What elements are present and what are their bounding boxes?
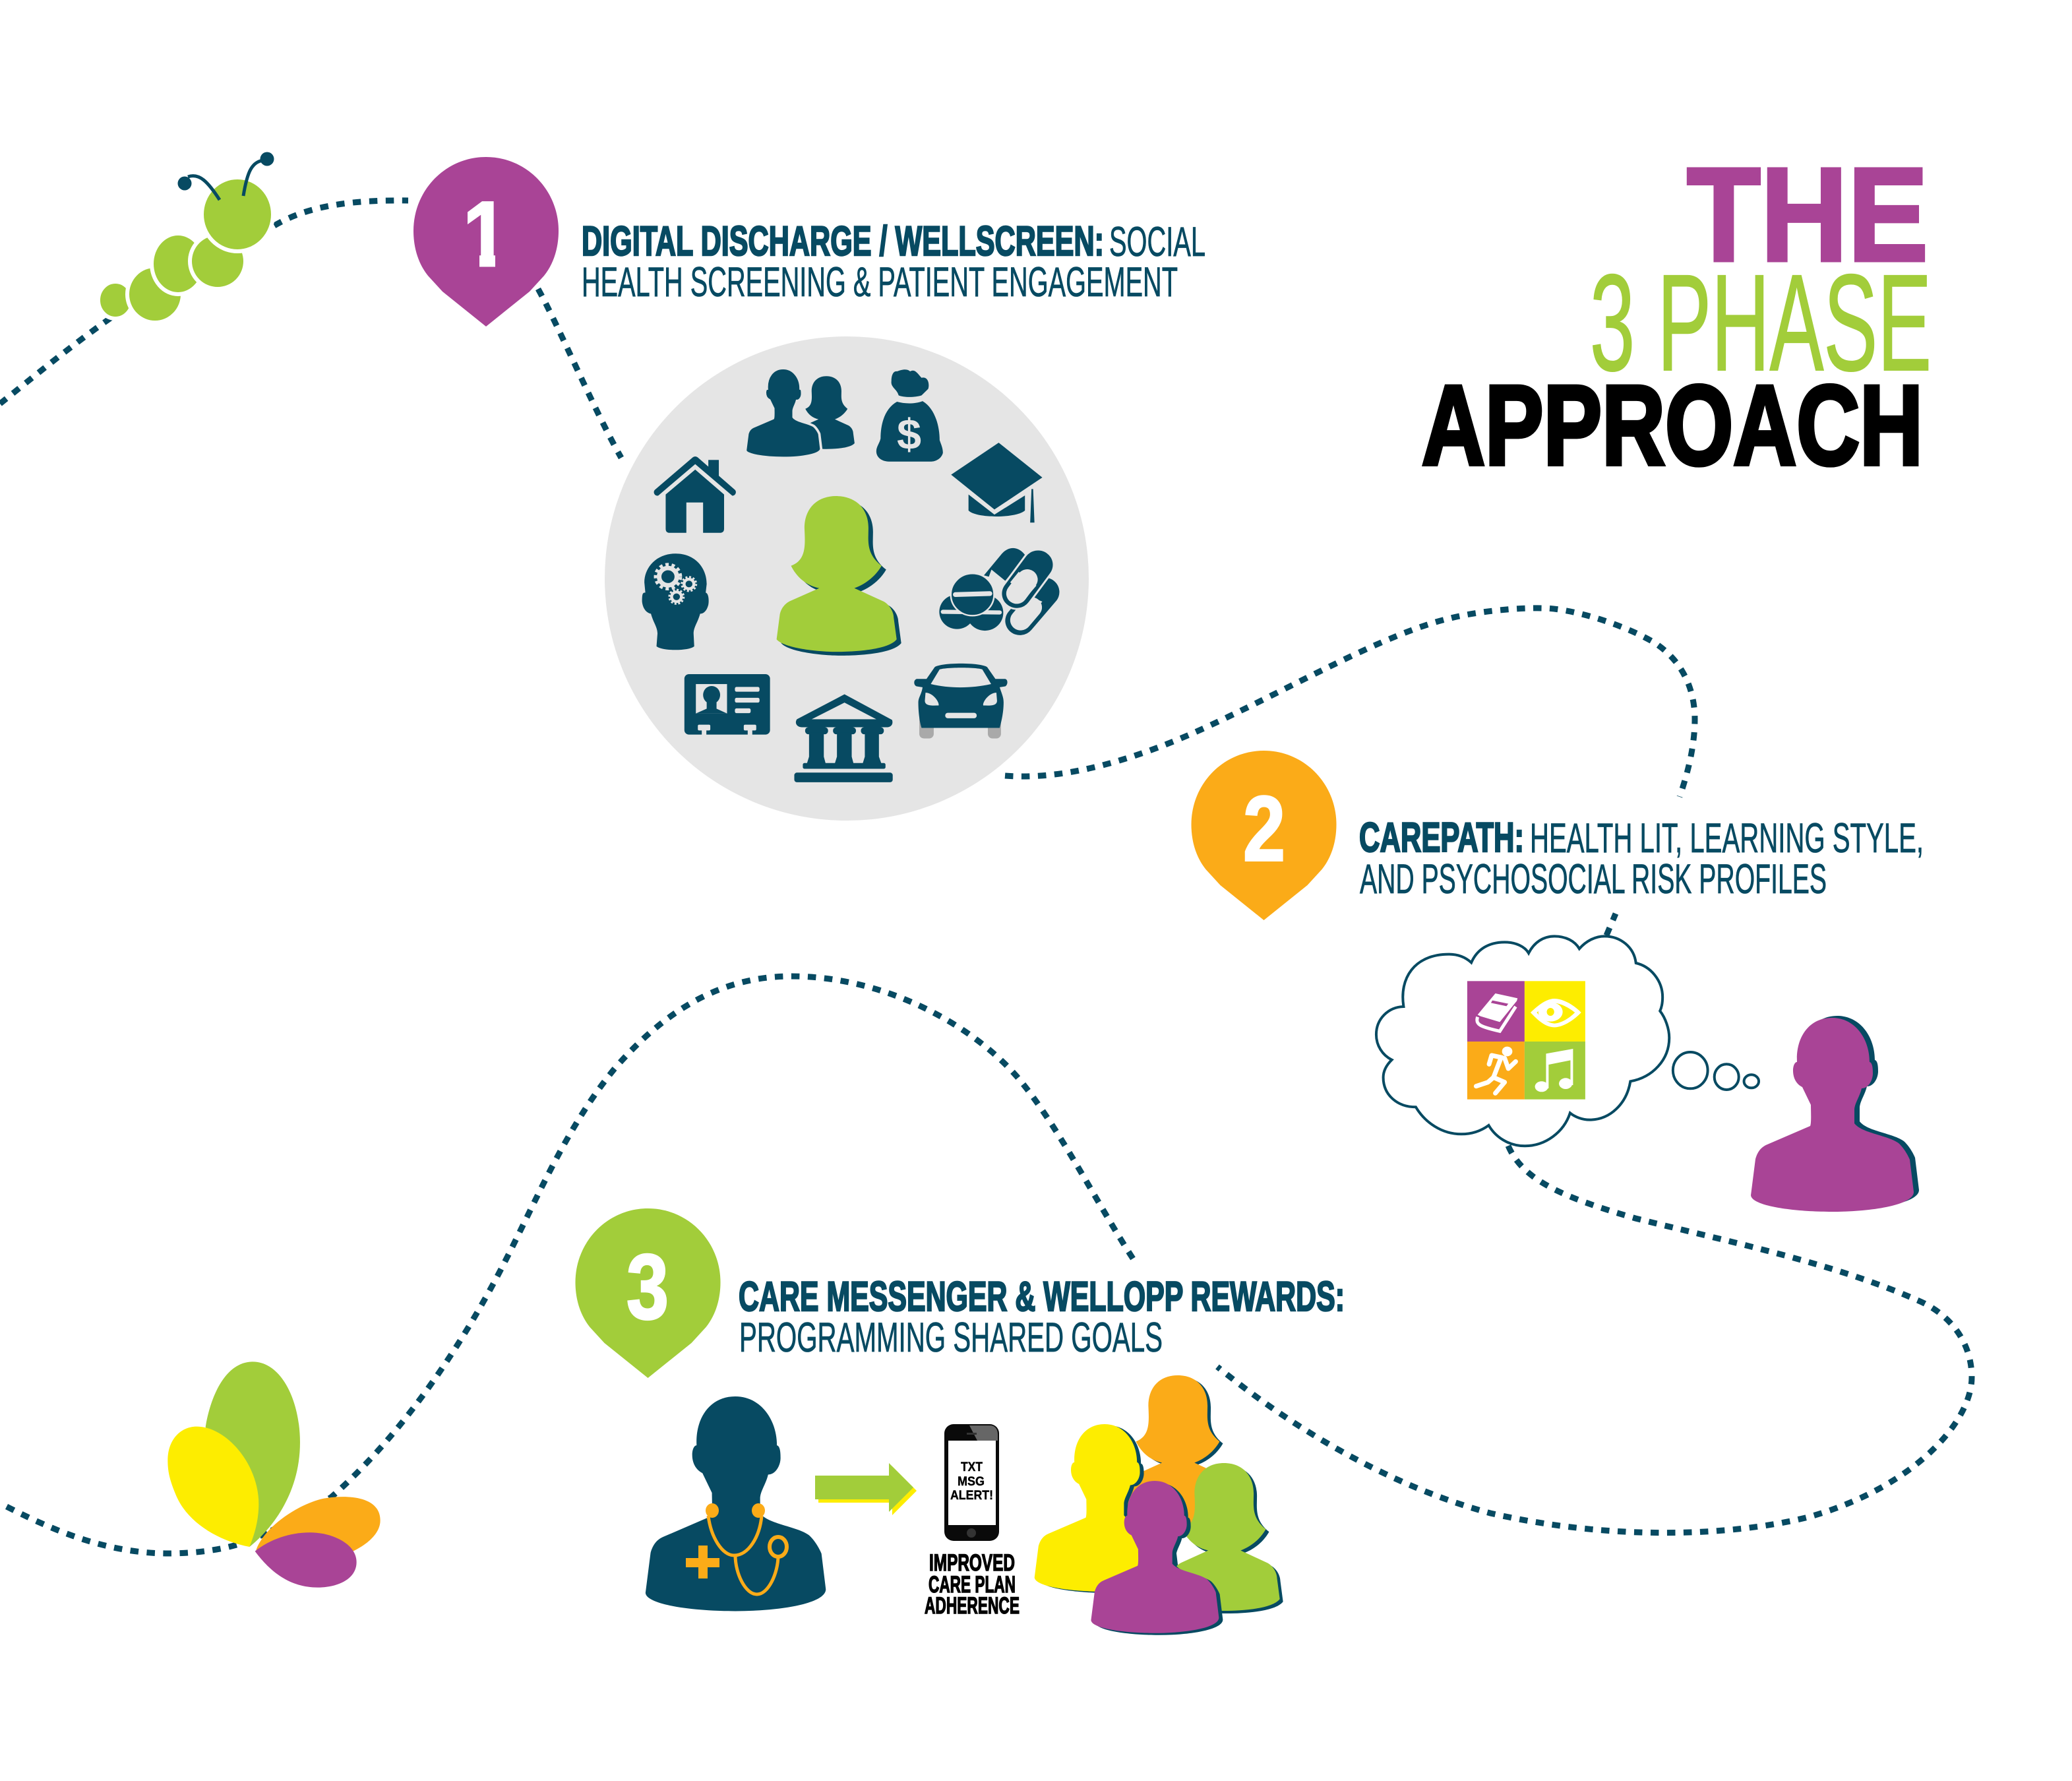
arrow	[815, 1463, 917, 1515]
pin 2	[1191, 751, 1336, 920]
pin 3	[575, 1208, 720, 1378]
icon: eye tile	[1525, 981, 1585, 1042]
dashed journey path	[0, 201, 1972, 1553]
icon: doctor with stethoscope	[646, 1396, 826, 1611]
icon: smartphone with text alert	[944, 1424, 999, 1541]
heading: phase 3: PROGRAMMING SHARED GOALS	[739, 1315, 1163, 1361]
heading: phase 3: CARE MESSENGER & WELLOPP REWARDS:	[739, 1274, 1345, 1320]
pin 3: 3	[626, 1235, 669, 1338]
icon: pills	[939, 548, 1045, 631]
heading: phase 1	[582, 218, 1205, 305]
caption: improved care plan adherence	[925, 1550, 1020, 1619]
icon: book tile	[1467, 981, 1525, 1042]
caption: improved care plan adherence: ADHERENCE	[925, 1593, 1020, 1619]
icon: ID card	[685, 674, 770, 735]
pin 1	[413, 157, 559, 327]
panel: social health factors circle	[605, 336, 1089, 821]
icon: runner tile	[1467, 1042, 1525, 1100]
icon: smartphone with text alert: ALERT!	[950, 1489, 993, 1503]
title	[1422, 140, 1932, 489]
heading: phase 1: HEALTH SCREENING & PATIENT ENGAGEMENT	[582, 259, 1178, 305]
heading: phase 1: SOCIAL	[1109, 219, 1205, 265]
icon: bank building	[794, 695, 893, 782]
caption: improved care plan adherence: CARE PLAN	[929, 1572, 1016, 1598]
icon: head with gears	[642, 553, 709, 650]
title: THE	[1687, 140, 1928, 289]
icon: money bag	[876, 369, 943, 462]
heading: phase 2: CAREPATH:	[1359, 815, 1524, 861]
icon: couple	[745, 368, 855, 458]
heading: phase 1: DIGITAL DISCHARGE / WELLSCREEN:	[582, 218, 1104, 265]
pin 1: 1	[463, 182, 508, 286]
icon: purple person thinking	[1751, 1016, 1919, 1212]
icon: graduation cap	[951, 443, 1043, 522]
heading: phase 3	[739, 1274, 1345, 1361]
icon: butterfly	[168, 1361, 381, 1588]
icon: smartphone with text alert: TXT	[961, 1460, 983, 1474]
heading: phase 2	[1359, 815, 1924, 902]
caption: improved care plan adherence: IMPROVED	[929, 1550, 1015, 1576]
icon: caterpillar	[98, 152, 274, 323]
pin 2: 2	[1243, 777, 1285, 880]
icon: car	[914, 664, 1008, 738]
icon: house	[656, 460, 735, 533]
icon: music tile	[1525, 1042, 1585, 1100]
icon: central patient	[777, 496, 901, 656]
thought bubbles	[1673, 1052, 1759, 1090]
title: APPROACH	[1422, 362, 1923, 489]
icon: smartphone with text alert: MSG	[958, 1475, 985, 1489]
icon: group of people	[1035, 1375, 1283, 1635]
icon: money bag: $	[897, 410, 921, 458]
thought cloud with learning styles	[1376, 936, 1759, 1146]
